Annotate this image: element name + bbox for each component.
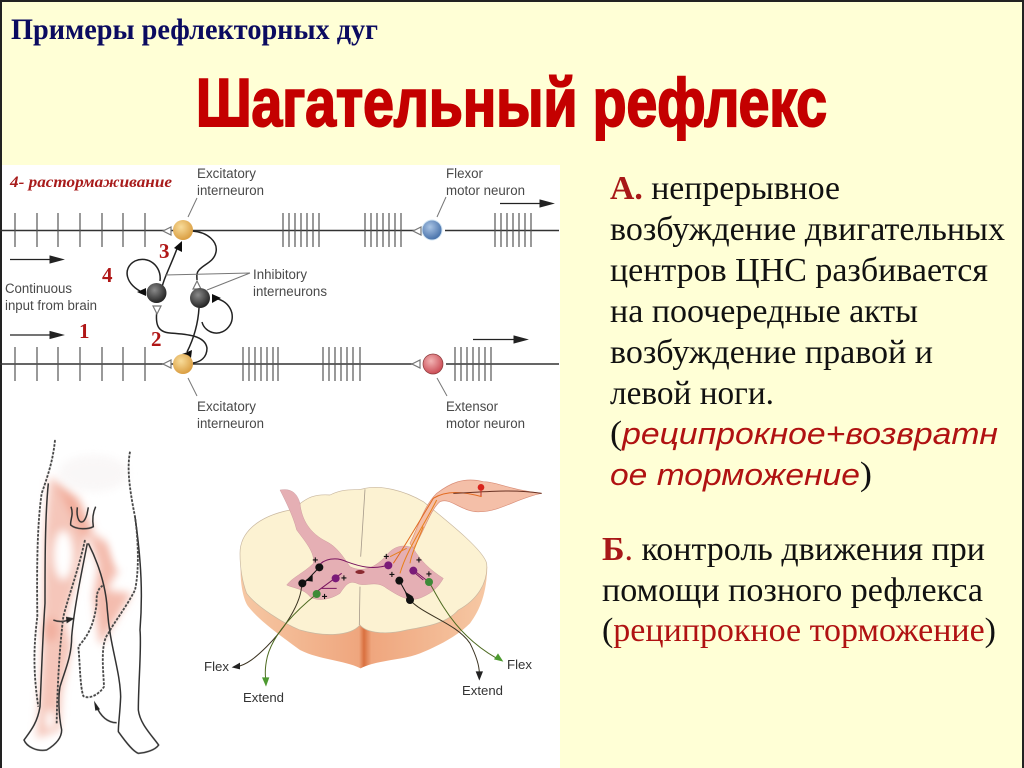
plus signs: + (322, 592, 328, 603)
red step numbers (79, 239, 170, 351)
spinal cord front face (241, 567, 487, 668)
pelvis shadow (58, 455, 128, 492)
text block B: Б. контроль движения при (602, 531, 985, 568)
circuit labels: interneurons (253, 284, 327, 299)
plus signs: + (312, 556, 318, 567)
interneuron connections (127, 197, 447, 396)
plus signs: + (416, 555, 422, 566)
circuit labels (5, 166, 525, 431)
circuit labels: Inhibitory (253, 267, 307, 282)
ganglion neuron (478, 484, 484, 491)
text block A: (реципрокное+возвратн (610, 415, 998, 452)
text block A: центров ЦНС разбивается (610, 252, 988, 289)
excitatory interneuron bottom (173, 354, 193, 374)
text block A: левой ноги. (610, 375, 774, 412)
circuit labels: Excitatory (197, 166, 256, 181)
spinal cord output labels: Extend (243, 690, 284, 705)
inhibitory interneuron left (146, 283, 166, 303)
text block B (602, 531, 996, 649)
circuit labels: Extensor (446, 399, 498, 414)
circuit labels: Continuous (5, 281, 72, 296)
synapse arrowheads (137, 241, 221, 358)
note: disinhibition: 4- растормаживание (9, 174, 172, 191)
white illustration panel background (2, 165, 560, 768)
panel: neural circuit diagram (0, 166, 559, 431)
red step numbers: 4 (102, 263, 113, 287)
text block A: А. непрерывное (610, 170, 840, 207)
circuit labels: Excitatory (197, 399, 256, 414)
circuit labels: interneuron (197, 416, 264, 431)
text block A (610, 170, 1005, 493)
plus signs: + (383, 552, 389, 563)
red step numbers: 3 (159, 239, 170, 263)
extensor axon line with spikes (0, 347, 559, 381)
plus signs: + (426, 569, 432, 580)
text block A: возбуждение двигательных (610, 211, 1005, 248)
spinal cord top face (240, 487, 487, 635)
direction arrows (10, 200, 553, 343)
output arrowheads (232, 653, 503, 687)
excitatory interneuron top (173, 220, 193, 240)
plus signs (312, 552, 432, 603)
gray matter and dorsal root (280, 490, 443, 600)
spinal cord output labels: Flex (507, 657, 533, 672)
extensor motor neuron (423, 354, 443, 374)
circuit labels: Flexor (446, 166, 483, 181)
leg arrowheads (66, 617, 100, 711)
spinal cord output labels (204, 657, 533, 705)
motor neuron output paths (237, 567, 497, 678)
flexor motor neuron (422, 220, 442, 240)
illustration: legs during stepping (24, 440, 159, 753)
text block A: на поочередные акты (610, 293, 918, 330)
leg shading (37, 477, 132, 738)
commissural and interneuron fibers (317, 559, 428, 592)
title: Шагательный рефлекс (196, 65, 827, 141)
red step numbers: 2 (151, 327, 162, 351)
circuit labels: motor neuron (446, 183, 525, 198)
text block A: возбуждение правой и (610, 334, 933, 371)
inhibitory interneuron right (190, 288, 210, 308)
leg contours dashed (34, 440, 138, 723)
median fissure (359, 489, 365, 625)
section heading: Примеры рефлекторных дуг (11, 13, 378, 46)
sensory fibers (390, 488, 542, 573)
spinal cord output labels: Extend (462, 683, 503, 698)
text block B: помощи позного рефлекса (602, 572, 983, 609)
flexor axon line with spikes (0, 213, 559, 247)
leg contours solid (24, 483, 159, 753)
circuit labels: motor neuron (446, 416, 525, 431)
text block A: ое торможение ) (610, 456, 872, 493)
leg highlights (45, 497, 135, 730)
spinal cord output labels: Flex (204, 659, 230, 674)
circuit labels: interneuron (197, 183, 264, 198)
red step numbers: 1 (79, 319, 90, 343)
hollow synapse triangles (153, 227, 421, 368)
plus signs: + (341, 574, 347, 585)
plus signs: + (389, 570, 395, 581)
dorsal root ganglion (410, 480, 542, 548)
text block B: (реципрокное торможение) (602, 612, 996, 649)
spinal neurons (298, 561, 433, 604)
illustration: spinal cord cross-section (232, 480, 542, 687)
circuit labels: input from brain (5, 298, 97, 313)
